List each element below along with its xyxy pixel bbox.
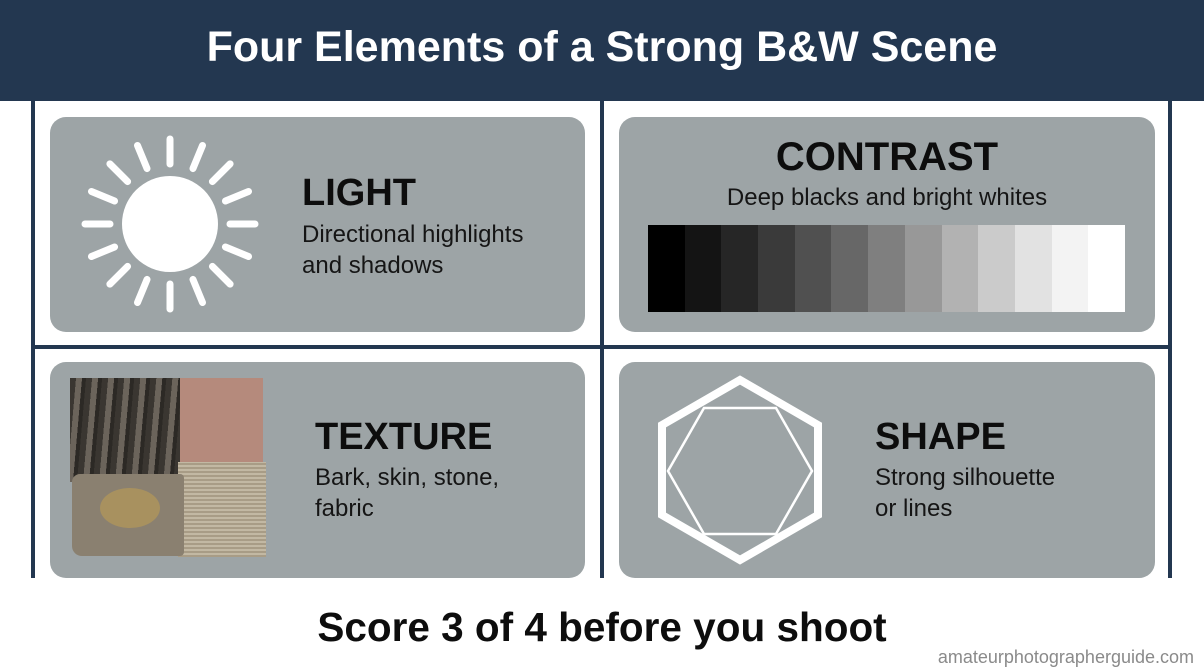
heading: light: LIGHT	[302, 172, 416, 214]
text: contrast: Deep blacks and bright whites	[727, 184, 1047, 211]
heading: texture: TEXTURE	[315, 416, 492, 458]
panel: texture	[50, 362, 585, 578]
text: texture	[315, 464, 499, 522]
panel: contrast	[619, 117, 1155, 332]
text: texture: fabric	[315, 495, 374, 522]
watermark: amateurphotographerguide.com	[938, 647, 1194, 667]
icon: texture collage	[70, 378, 266, 557]
text: light: and shadows	[302, 252, 443, 279]
heading: shape: SHAPE	[875, 416, 1006, 458]
text: shape: Strong silhouette	[875, 464, 1055, 491]
text: texture: Bark, skin, stone,	[315, 464, 499, 491]
icon: sun	[82, 136, 258, 312]
gradient bar	[648, 225, 1125, 312]
text: shape: or lines	[875, 495, 952, 522]
header bar	[0, 0, 1204, 101]
heading: contrast: CONTRAST	[776, 135, 998, 179]
text: light	[302, 221, 523, 279]
panel: light	[50, 117, 585, 332]
icon: hexagon	[658, 376, 822, 564]
panel: shape	[619, 362, 1155, 578]
text: light: Directional highlights	[302, 221, 523, 248]
title: Four Elements of a Strong B&W Scene	[207, 23, 997, 71]
text: shape	[875, 464, 1055, 522]
footer text: Score 3 of 4 before you shoot	[317, 604, 887, 650]
